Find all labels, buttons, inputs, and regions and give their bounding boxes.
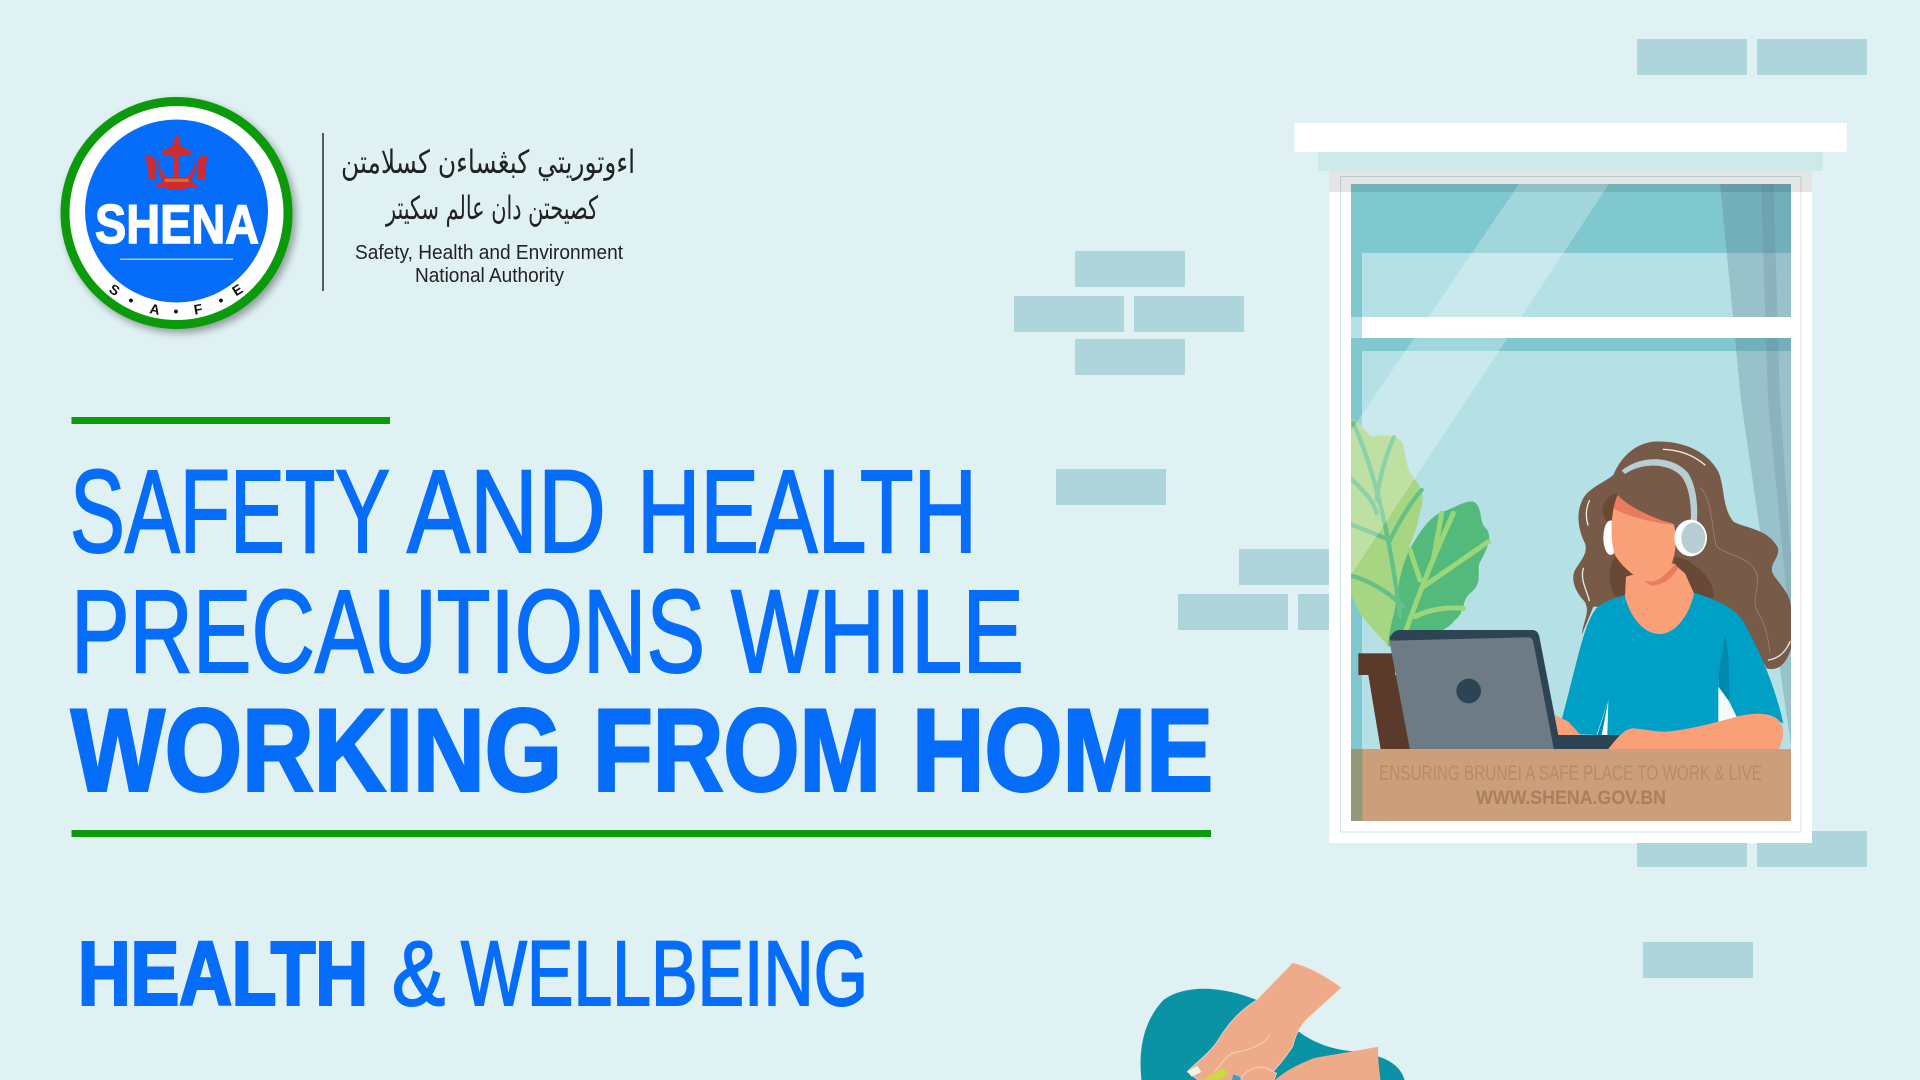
window illustration (1294, 123, 1847, 843)
authority name in English: Safety, Health and Environment (355, 242, 623, 264)
fingers (1240, 1067, 1277, 1080)
knuckle line (1215, 1035, 1269, 1072)
authority name in English: National Authority (415, 265, 564, 287)
logo SAFE letters: S (106, 280, 123, 299)
sill slogan: ENSURING BRUNEI A SAFE PLACE TO WORK & LIVE (1379, 762, 1762, 785)
hair highlights (1582, 449, 1790, 660)
shirt (1562, 593, 1783, 735)
logo SAFE letters: A (148, 300, 161, 318)
logo SAFE letters: • (129, 292, 134, 308)
sunlight beam (1351, 184, 1609, 575)
upper hand (1187, 963, 1342, 1080)
lower hand (1273, 1047, 1381, 1080)
title: WHILE (731, 566, 1024, 698)
left earcup (1603, 520, 1614, 555)
logo SAFE letters: E (229, 280, 246, 299)
logo divider (322, 133, 324, 291)
sill website: WWW.SHENA.GOV.BN (1476, 788, 1666, 809)
plant, laptop and person (1347, 415, 1791, 750)
darker hair shadows (1603, 493, 1713, 598)
right earcup (1674, 520, 1707, 556)
title (70, 446, 1213, 816)
neck shadow (1642, 563, 1678, 585)
section heading (78, 923, 868, 1025)
window sash bar (1351, 317, 1791, 338)
logo SAFE letters: • (219, 292, 224, 308)
white gaps between arms and body (1596, 678, 1738, 735)
headband (1622, 459, 1697, 525)
curtain (1720, 184, 1791, 745)
plant (1347, 415, 1489, 647)
title: HEALTH (637, 446, 977, 578)
neck (1625, 563, 1694, 634)
soap blue (1232, 1074, 1241, 1080)
top green rule (72, 417, 390, 424)
SHENA logo (60, 97, 296, 333)
authority name in Jawi: اءوتوريتي كبڠساءن كسلامتن (341, 143, 635, 181)
icon: royal crest (144, 133, 209, 190)
title: HOME (912, 684, 1213, 816)
logo wordmark: SHENA (95, 193, 259, 255)
bottom green rule (72, 830, 1211, 837)
window cornice (1294, 123, 1847, 152)
authority name in Jawi (341, 143, 635, 227)
logo SAFE letters: F (193, 300, 204, 318)
shirt sleeve shadows (1597, 633, 1729, 735)
window sill (1351, 749, 1791, 821)
title: SAFETY (70, 446, 390, 578)
fringe shadow (1613, 495, 1673, 525)
authority name in Jawi: كصيحتن دان عالم سكيتر (385, 189, 598, 227)
soap yellow (1203, 1068, 1228, 1080)
plant pot (1358, 653, 1412, 749)
title: FROM (593, 684, 881, 816)
thumbnail (1187, 1066, 1201, 1077)
section heading: & (392, 923, 445, 1025)
laptop (1389, 630, 1620, 750)
logo SAFE letters (106, 280, 246, 319)
window frame (1329, 171, 1812, 843)
window glass (1351, 184, 1791, 749)
logo SAFE letters: • (174, 303, 179, 319)
face (1612, 495, 1676, 582)
title: AND (407, 446, 606, 578)
title: PRECAUTIONS (71, 566, 705, 698)
arms and hands (1555, 714, 1783, 750)
authority name in English (355, 242, 623, 287)
curtain hair and body (1562, 441, 1791, 735)
teal blob (1141, 989, 1405, 1080)
title: WORKING (71, 684, 562, 816)
section heading: WELLBEING (461, 923, 868, 1025)
section heading: HEALTH (78, 924, 368, 1024)
background bricks (1014, 39, 1867, 978)
cornice shadow (1318, 152, 1823, 171)
frame top shade (1329, 171, 1812, 192)
handwashing illustration (1141, 963, 1405, 1080)
hair (1573, 441, 1791, 669)
